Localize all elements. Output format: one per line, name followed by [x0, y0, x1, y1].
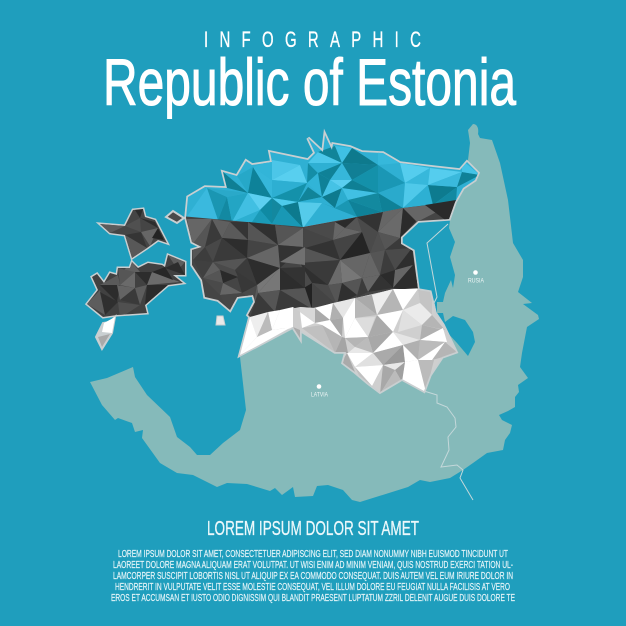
Lake Peipus	[445, 316, 475, 356]
Estonia map: low-poly flag stripes	[186, 135, 478, 392]
island: tiny islet	[216, 316, 225, 325]
island: Hiiumaa	[95, 205, 170, 260]
island: small islet	[166, 211, 184, 223]
border lines	[424, 224, 473, 500]
island: Saaremaa	[85, 250, 190, 320]
island: white islet	[96, 317, 115, 349]
body text	[111, 549, 515, 604]
neighbouring land: Latvia and Russia	[90, 124, 539, 502]
white stripe	[240, 288, 456, 392]
marker: Latvia	[311, 384, 329, 398]
subheading: LOREM IPSUM DOLOR SIT AMET	[207, 517, 419, 540]
Estonia mainland outline	[186, 135, 478, 392]
black stripe	[180, 200, 460, 325]
eyebrow: INFOGRAPHIC: INFOGRAPHIC	[204, 27, 421, 52]
marker: Russia	[468, 270, 485, 284]
marker: Russia: RUSIA	[468, 278, 485, 284]
marker: Latvia: LATVIA	[311, 392, 329, 398]
blue stripe	[186, 135, 478, 227]
